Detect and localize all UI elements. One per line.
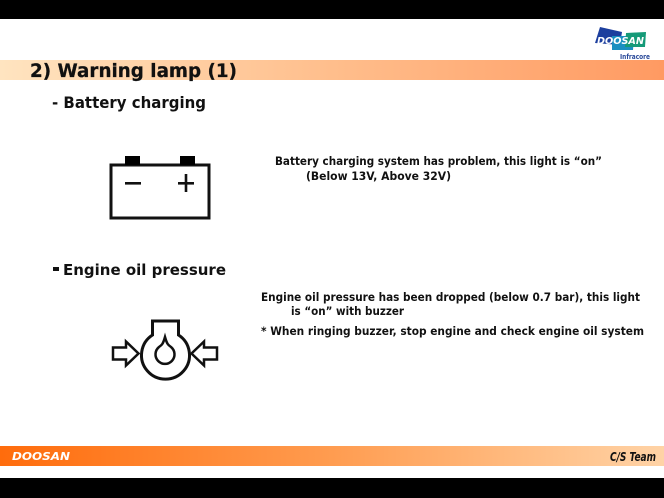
footer band <box>0 446 664 466</box>
heading: engine oil pressure: Engine oil pressure <box>63 261 226 279</box>
text: battery description <box>275 154 602 183</box>
title band <box>0 60 664 80</box>
logo: Doosan Infracore: DOOSAN <box>597 36 645 47</box>
bottom black bar <box>0 478 664 498</box>
icon: battery <box>111 156 209 218</box>
footer brand: DOOSAN <box>12 451 70 463</box>
text: engine oil description: is “on” with buzzer <box>291 304 404 318</box>
icon: engine oil pressure <box>113 321 217 379</box>
text: battery description: Battery charging system has problem, this light is “on” <box>275 154 602 168</box>
title: 2) Warning lamp (1) <box>30 60 237 82</box>
text: battery description: (Below 13V, Above 32V) <box>306 169 451 183</box>
heading: battery charging: - Battery charging <box>52 93 206 112</box>
logo: Doosan Infracore: Infracore <box>620 53 650 61</box>
top black bar <box>0 0 664 19</box>
logo: Doosan Infracore <box>595 27 650 61</box>
text: engine oil description <box>261 290 644 338</box>
